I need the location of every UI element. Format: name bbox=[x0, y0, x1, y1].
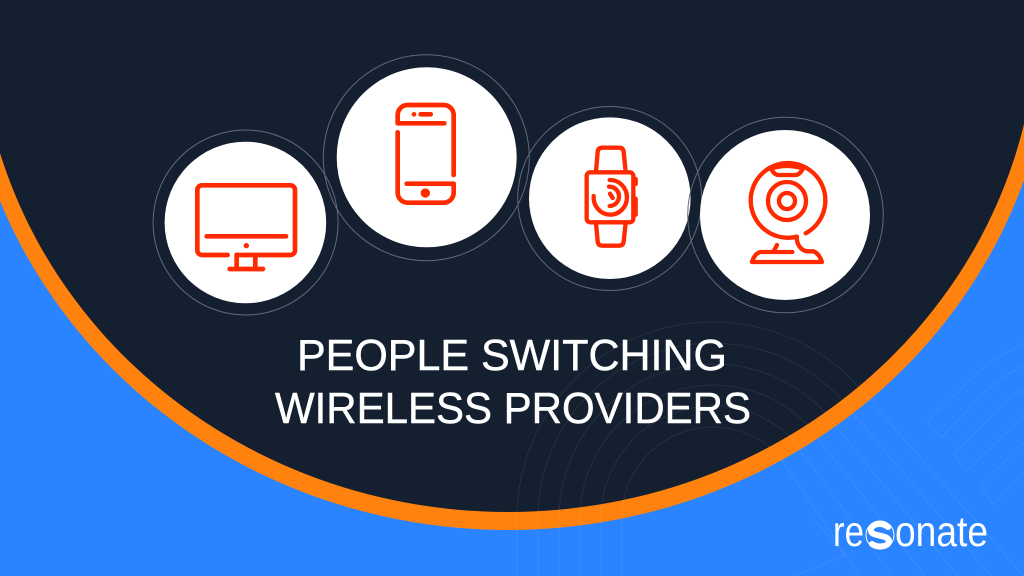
faint background line pattern bbox=[517, 322, 1024, 576]
icon: webcam bbox=[751, 163, 825, 262]
icon: smartwatch bbox=[587, 148, 636, 246]
logo: resonate bbox=[833, 508, 988, 556]
title bbox=[275, 331, 751, 433]
icon: smartphone bbox=[398, 105, 454, 203]
title: WIRELESS PROVIDERS bbox=[275, 384, 751, 433]
icon: desktop monitor bbox=[197, 185, 295, 269]
device circle: smartwatch bbox=[518, 106, 702, 290]
logo: resonate: re bbox=[833, 508, 864, 556]
device circle: webcam bbox=[688, 117, 883, 313]
icon: logo swirl S bbox=[866, 521, 894, 549]
logo: resonate: onate bbox=[895, 508, 988, 556]
title: PEOPLE SWITCHING bbox=[297, 331, 727, 380]
device circle: desktop monitor bbox=[153, 130, 338, 315]
device circle: smartphone bbox=[323, 55, 529, 261]
